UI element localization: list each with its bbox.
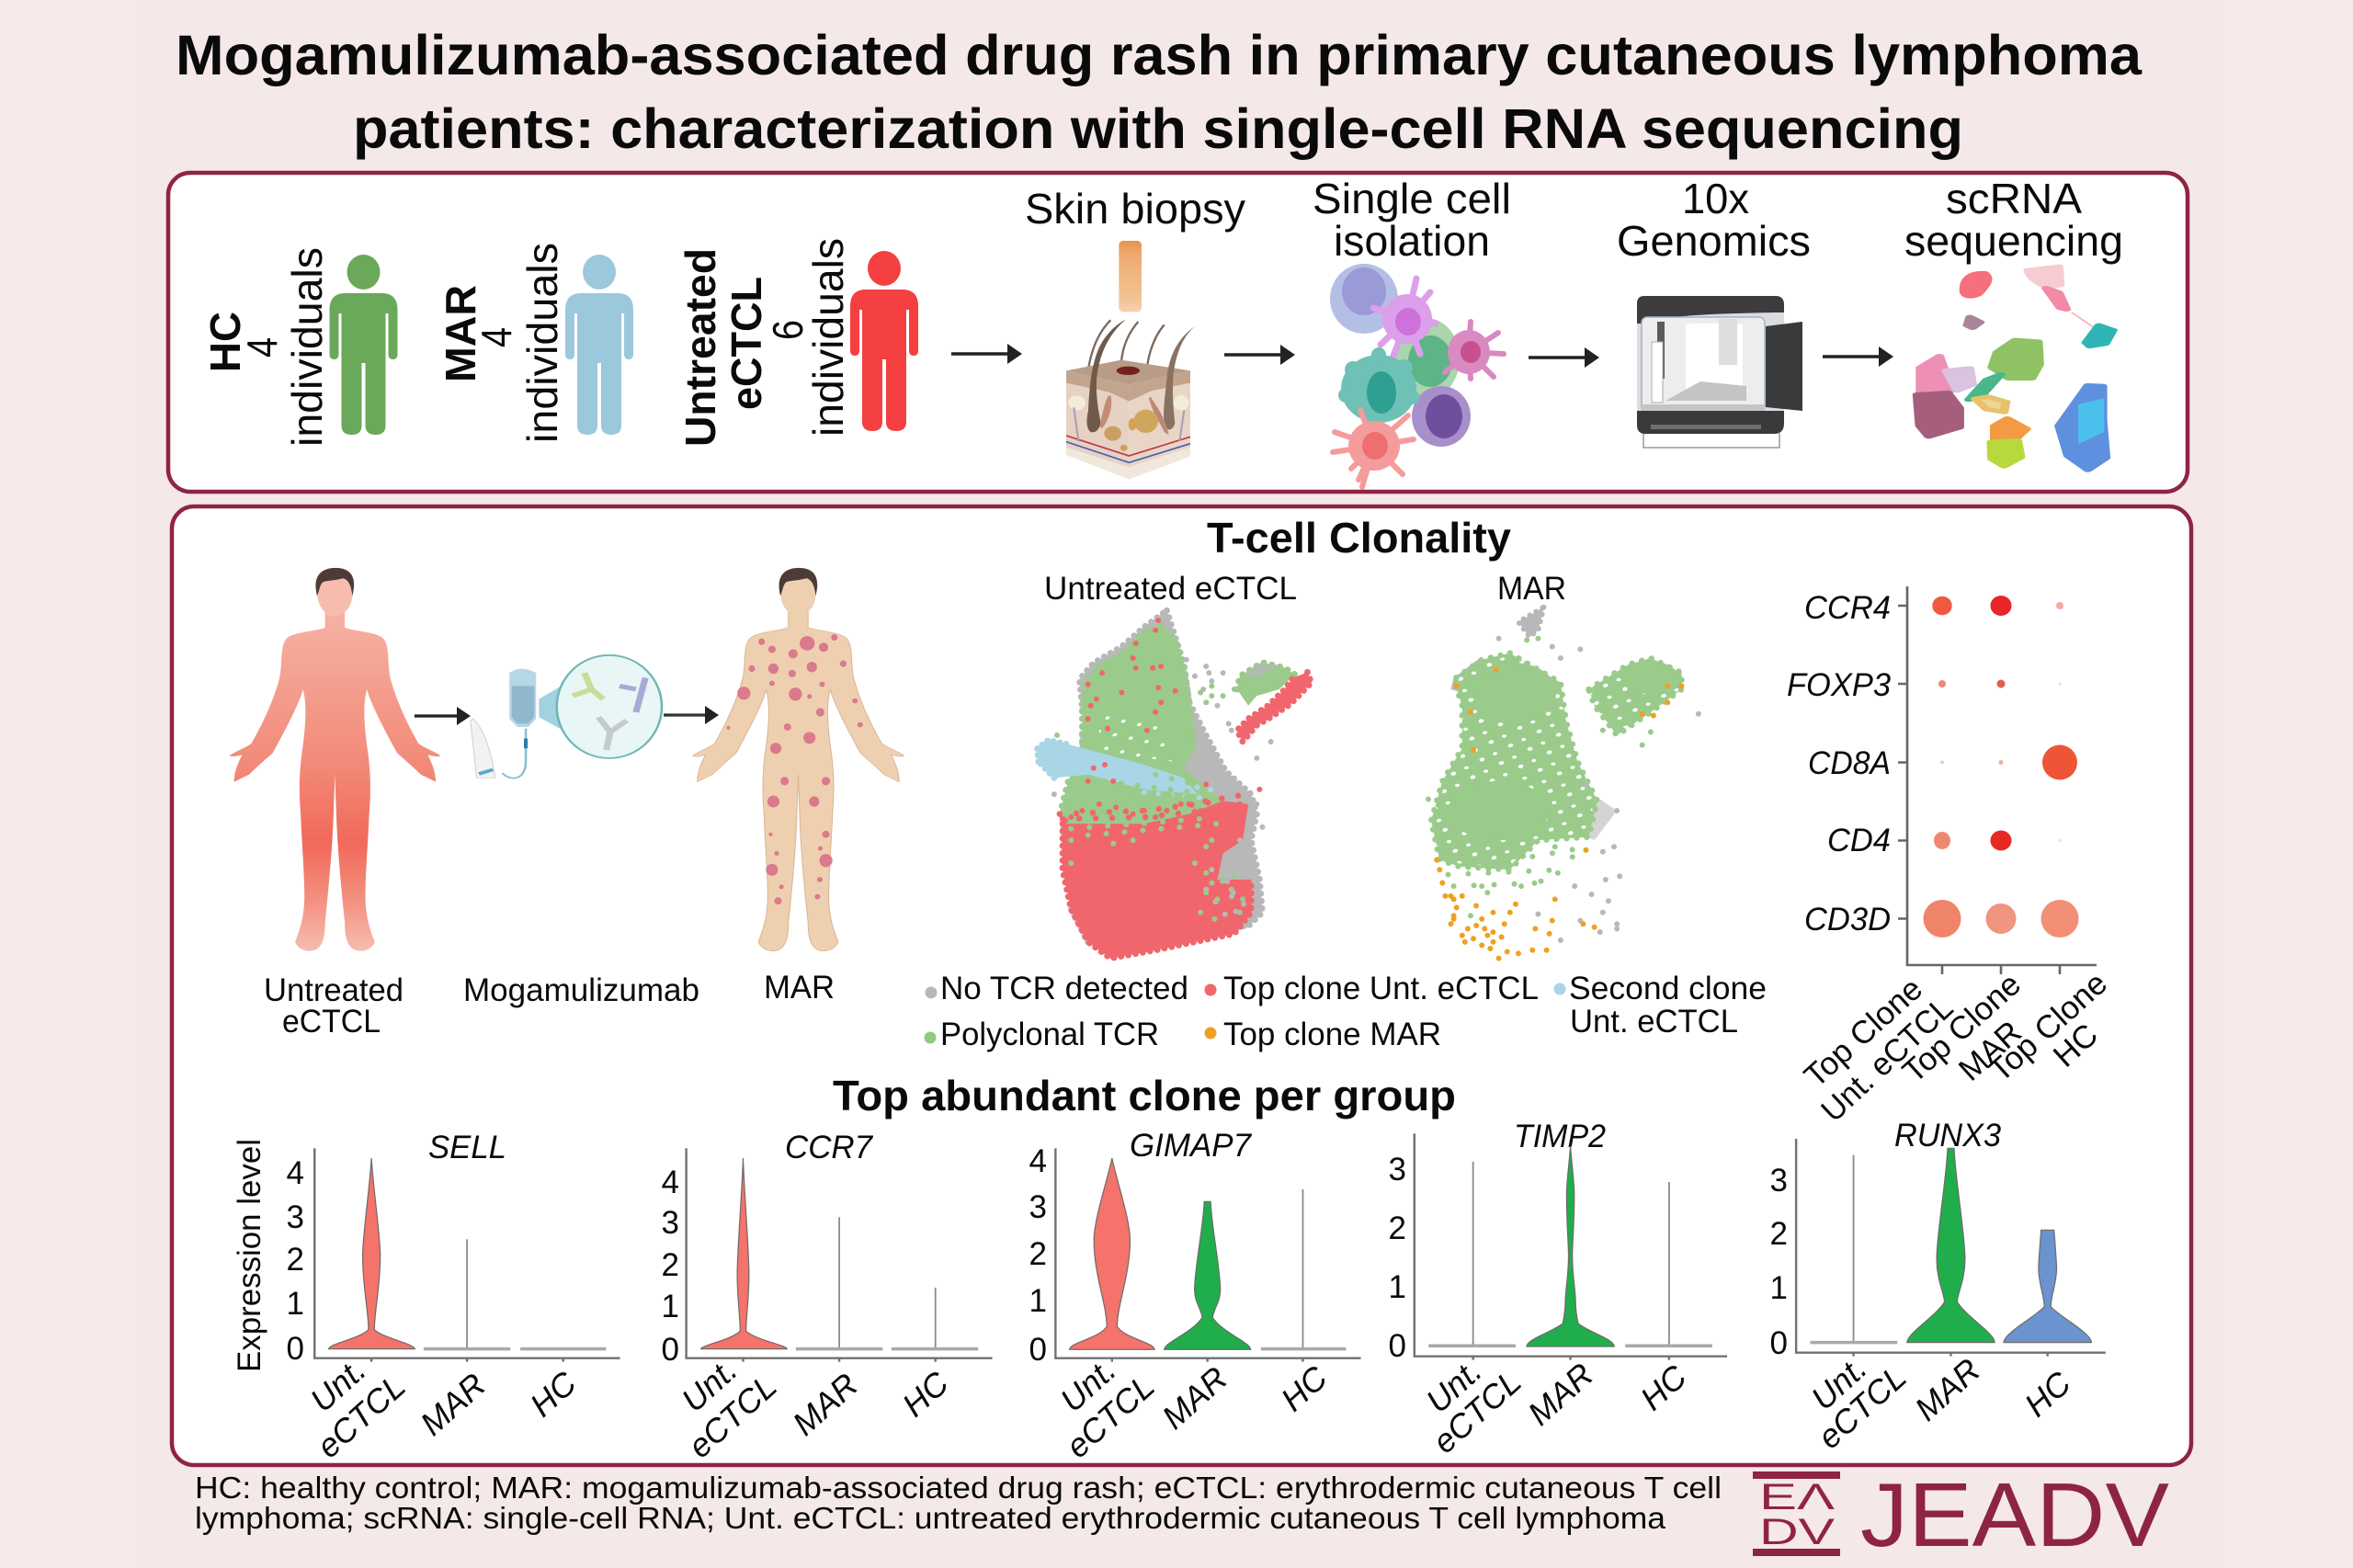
legend: clone categories: Top clone Unt. eCTCL (1223, 971, 1539, 1006)
chart: gene dot plot: CD8A (1808, 745, 1891, 781)
chart: GIMAP7 violin: 1 (1029, 1283, 1047, 1319)
chart: TIMP2 violin: Unt. (1418, 1351, 1489, 1420)
label: untreated eCTCL group: eCTCL (722, 277, 770, 410)
chart: gene dot plot: Unt. eCTCL (1814, 990, 1960, 1129)
heading: 10x genomics: Genomics (1617, 217, 1811, 265)
heading: single cell isolation: isolation (1334, 217, 1490, 265)
label: untreated eCTCL group (676, 238, 852, 447)
chart: RUNX3 violin: Unt. (1803, 1348, 1874, 1417)
arrow: to MAR (664, 706, 719, 724)
legend: clone categories: Second clone (1569, 971, 1767, 1006)
chart: TIMP2 violin: 1 (1389, 1269, 1406, 1305)
label: MAR group: individuals (518, 243, 566, 443)
chart: SELL violin: Unt. (302, 1350, 373, 1419)
chart: RUNX3 violin: 3 (1770, 1163, 1788, 1199)
icon: mogamulizumab infusion (471, 655, 662, 778)
chart: SELL violin: HC (523, 1363, 584, 1424)
chart: gene dot plot: Top Clone (1896, 966, 2028, 1090)
label: MAR group (437, 243, 566, 443)
chart titles: UMAP: Untreated eCTCL (1044, 571, 1297, 607)
chart: SELL violin: 4 (287, 1155, 304, 1191)
title (176, 24, 2143, 160)
chart: CCR7 violin: 1 (662, 1289, 679, 1324)
labels: treatment sequence: Mogamulizumab (463, 972, 699, 1008)
labels: treatment sequence: Untreated (264, 972, 404, 1008)
heading: scRNA sequencing: scRNA (1946, 175, 2082, 222)
chart: RUNX3 violin: 1 (1770, 1270, 1788, 1306)
chart: GIMAP7 violin (1029, 1128, 1361, 1465)
chart: GIMAP7 violin: GIMAP7 (1130, 1128, 1253, 1164)
chart: GIMAP7 violin: 4 (1029, 1143, 1047, 1179)
chart: gene dot plot (1787, 586, 2114, 1129)
label: untreated eCTCL group: 6 (764, 320, 812, 340)
chart titles: UMAP (1044, 571, 1566, 607)
chart: CCR7 violin: HC (895, 1363, 956, 1424)
legend: clone categories: Polyclonal TCR (940, 1017, 1159, 1052)
heading: T-cell clonality: T-cell Clonality (1207, 514, 1511, 562)
heading: 10x genomics (1617, 175, 1811, 265)
title: Mogamulizumab-associated drug rash in primary cutaneous lymphoma (176, 24, 2143, 86)
chart: SELL violin (287, 1130, 620, 1465)
labels: treatment sequence: MAR (764, 970, 835, 1006)
panel: T-cell clonality and clones (172, 506, 2191, 1465)
legend: clone categories: No TCR detected (940, 971, 1188, 1006)
chart: TIMP2 violin: HC (1633, 1357, 1694, 1417)
chart: SELL violin: 3 (287, 1199, 304, 1235)
chart: UMAP untreated eCTCL (1038, 610, 1312, 959)
chart: GIMAP7 violin: eCTCL (1059, 1367, 1162, 1465)
chart: CCR7 violin: MAR (785, 1366, 865, 1443)
axis label: expression level: Expression level (232, 1139, 267, 1372)
chart: RUNX3 violin: RUNX3 (1894, 1118, 2002, 1153)
labels: treatment sequence (264, 970, 835, 1040)
chart: gene dot plot: HC (2047, 1017, 2105, 1074)
footnote: abbreviations (195, 1471, 1722, 1535)
chart: TIMP2 violin: 2 (1389, 1210, 1406, 1246)
legend: clone categories: Unt. eCTCL (1570, 1004, 1738, 1040)
icon: blue person (565, 255, 633, 435)
chart: CCR7 violin: 4 (662, 1165, 679, 1200)
icon: 10x instrument (1637, 296, 1802, 448)
arrow: to cell isolation (1224, 345, 1295, 365)
chart: GIMAP7 violin: 0 (1029, 1332, 1047, 1368)
logo: JEADV: DV (1759, 1512, 1835, 1552)
label: HC group: 4 (238, 337, 286, 358)
chart: gene dot plot: MAR (1952, 1014, 2029, 1088)
chart: TIMP2 violin: 0 (1389, 1328, 1406, 1364)
title: patients: characterization with single-cell RNA sequencing (353, 97, 1963, 160)
chart: RUNX3 violin: eCTCL (1811, 1358, 1914, 1456)
heading: single cell isolation: Single cell (1313, 175, 1511, 222)
chart: RUNX3 violin: MAR (1907, 1351, 1987, 1428)
legend: clone categories: Top clone MAR (1223, 1017, 1441, 1052)
chart: gene dot plot: CCR4 (1804, 590, 1891, 626)
chart: GIMAP7 violin: MAR (1154, 1359, 1234, 1437)
logo: JEADV: EΛ (1759, 1477, 1835, 1517)
chart: gene dot plot: CD3D (1804, 902, 1891, 937)
chart: CCR7 violin (662, 1130, 993, 1465)
chart: SELL violin: eCTCL (310, 1367, 413, 1465)
chart: SELL violin: MAR (413, 1366, 493, 1443)
chart: GIMAP7 violin: HC (1274, 1358, 1335, 1418)
chart: RUNX3 violin: 0 (1770, 1325, 1788, 1361)
icon: skin biopsy (1066, 241, 1195, 480)
chart: GIMAP7 violin: Unt. (1052, 1350, 1123, 1419)
icon: green person (329, 255, 397, 435)
arrow: to mogamulizumab (415, 707, 471, 725)
chart: SELL violin: SELL (428, 1130, 506, 1165)
chart: CCR7 violin: 0 (662, 1332, 679, 1368)
chart: TIMP2 violin (1389, 1119, 1727, 1460)
label: HC group: HC (201, 312, 249, 372)
figure: MAR body with rash (693, 568, 904, 951)
figure: untreated eCTCL body (230, 568, 440, 951)
chart: TIMP2 violin: 3 (1389, 1152, 1406, 1187)
arrow: to skin biopsy (951, 344, 1022, 364)
chart: scRNA UMAP clusters (1917, 267, 2113, 470)
label: MAR group: MAR (437, 285, 484, 382)
heading: scRNA sequencing (1904, 175, 2123, 265)
chart: SELL violin: 1 (287, 1286, 304, 1322)
label: HC group: individuals (283, 247, 331, 447)
arrow: to scRNA sequencing (1823, 347, 1893, 367)
icon: red person (850, 251, 918, 431)
label: untreated eCTCL group: Untreated (676, 248, 724, 447)
chart: CCR7 violin: Unt. (674, 1350, 745, 1419)
chart: SELL violin: 2 (287, 1242, 304, 1278)
chart: CCR7 violin: 2 (662, 1247, 679, 1283)
chart: UMAP MAR (1428, 608, 1699, 959)
label: HC group (201, 247, 331, 447)
chart titles: UMAP: MAR (1497, 571, 1566, 607)
chart: RUNX3 violin: 2 (1770, 1216, 1788, 1252)
chart: CCR7 violin: CCR7 (785, 1130, 874, 1165)
label: MAR group: 4 (472, 327, 520, 347)
labels: treatment sequence: eCTCL (282, 1004, 381, 1040)
heading: skin biopsy: Skin biopsy (1025, 185, 1245, 233)
chart: RUNX3 violin: HC (2018, 1363, 2078, 1424)
chart: gene dot plot: FOXP3 (1787, 667, 1892, 703)
chart: gene dot plot: CD4 (1827, 823, 1891, 858)
chart: SELL violin: 0 (287, 1331, 304, 1367)
heading: top abundant clone per group: Top abundant clone per group (833, 1072, 1456, 1119)
chart: TIMP2 violin: TIMP2 (1514, 1119, 1606, 1154)
arrow: to 10x genomics (1529, 347, 1599, 368)
chart: RUNX3 violin (1770, 1118, 2106, 1456)
heading: scRNA sequencing: sequencing (1904, 217, 2123, 265)
logo: JEADV: JEADV (1860, 1464, 2169, 1565)
chart: GIMAP7 violin: 2 (1029, 1236, 1047, 1272)
chart: gene dot plot: Top Clone (1798, 971, 1929, 1095)
legend: clone categories (925, 971, 1767, 1052)
chart: CCR7 violin: 3 (662, 1205, 679, 1241)
icon: immune cells (1330, 264, 1504, 487)
chart: TIMP2 violin: eCTCL (1426, 1362, 1529, 1460)
chart: gene dot plot: Top Clone (1983, 965, 2114, 1089)
logo: JEADV (1753, 1464, 2169, 1565)
footnote: abbreviations: HC: healthy control; MAR: mogamulizumab-associated drug rash; eCTCL: erythrodermic cutaneous T cell (195, 1471, 1722, 1505)
heading: 10x genomics: 10x (1682, 175, 1749, 222)
panel: study workflow (168, 173, 2188, 492)
chart: CCR7 violin: eCTCL (681, 1367, 784, 1465)
label: untreated eCTCL group: individuals (804, 238, 852, 437)
chart: GIMAP7 violin: 3 (1029, 1189, 1047, 1225)
footnote: abbreviations: lymphoma; scRNA: single-cell RNA; Unt. eCTCL: untreated erythrodermic cutaneous T cell lymphoma (195, 1501, 1666, 1535)
heading: single cell isolation (1313, 175, 1511, 265)
chart: TIMP2 violin: MAR (1520, 1356, 1600, 1433)
